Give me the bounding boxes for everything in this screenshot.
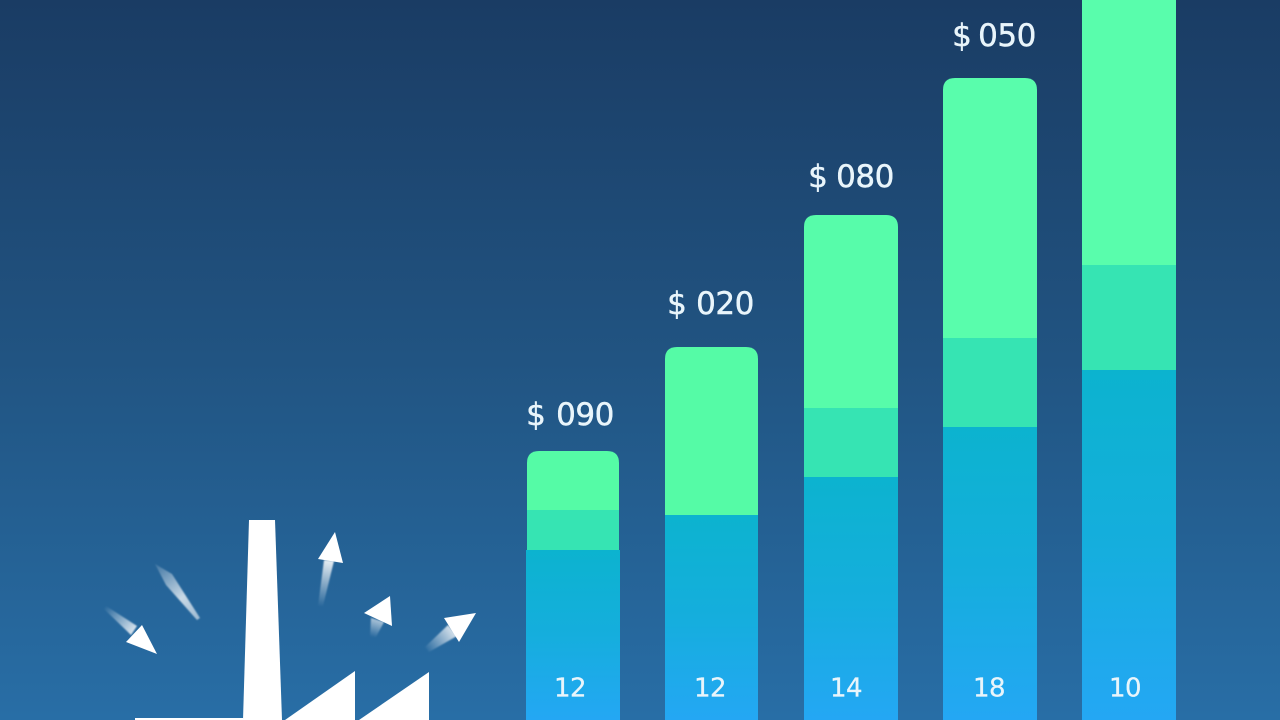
arrow: upward right	[425, 613, 476, 652]
label: bar 4 value	[952, 18, 1036, 54]
factory icon	[135, 520, 429, 720]
streak: inbound motion line	[155, 564, 200, 620]
label: bar 4 value: $	[952, 18, 972, 54]
bar 1	[526, 397, 620, 720]
label: bar 1 value: $	[526, 397, 546, 433]
bar 4	[943, 18, 1037, 720]
factory roof left	[285, 671, 355, 720]
label: bar 3 value	[808, 159, 894, 195]
label: bar 4 count: 18	[973, 674, 1005, 704]
label: bar 1 count: 12	[554, 674, 586, 704]
label: bar 3 count: 14	[830, 674, 862, 704]
label: bar 2 value: 020	[696, 286, 754, 322]
label: bar 2 value: $	[667, 286, 687, 322]
bar 3	[804, 159, 898, 720]
factory roof right	[359, 672, 429, 720]
bar chart	[526, 0, 1176, 720]
factory ground line	[135, 718, 243, 720]
label: bar 3 value: $	[808, 159, 828, 195]
bar 5	[1082, 0, 1176, 720]
label: bar 3 value: 080	[836, 159, 894, 195]
label: bar 4 value: 050	[978, 18, 1036, 54]
label: bar 5 count: 10	[1109, 674, 1141, 704]
label: bar 2 value	[667, 286, 754, 322]
arrow: small triangle	[364, 596, 392, 637]
label: bar 2 count: 12	[694, 674, 726, 704]
arrow: inbound lower left	[104, 606, 157, 654]
arrow: upward	[318, 532, 343, 606]
factory chimney	[243, 520, 282, 720]
label: bar 1 value	[526, 397, 614, 433]
bar 2	[665, 286, 758, 720]
label: bar 1 value: 090	[556, 397, 614, 433]
